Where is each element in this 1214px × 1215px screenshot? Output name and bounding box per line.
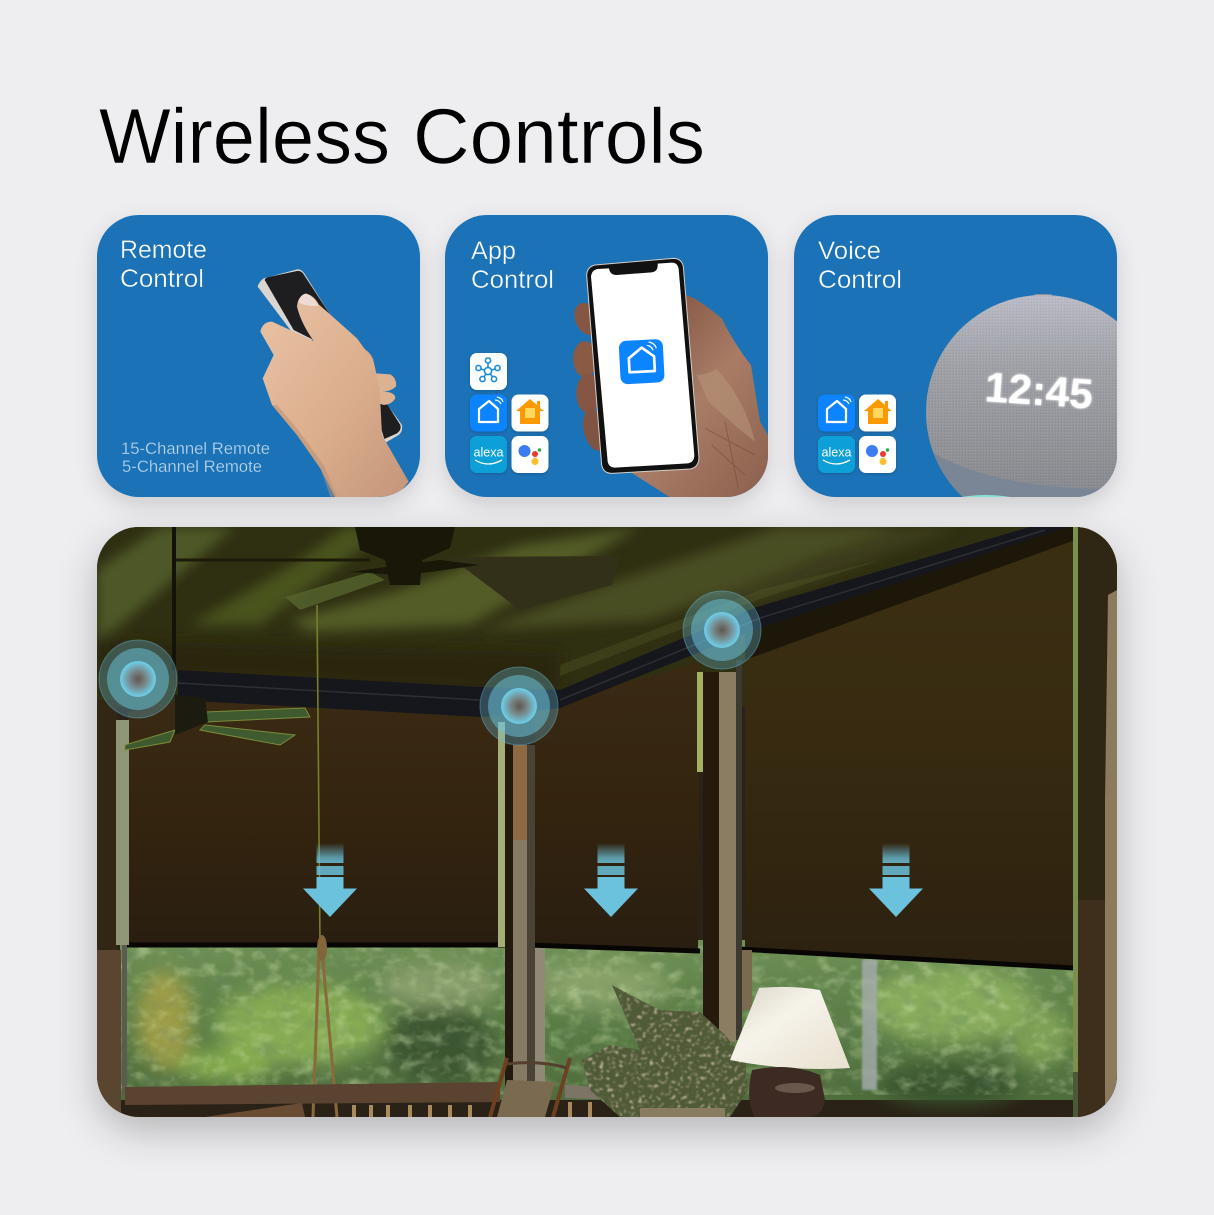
rocking chair — [490, 1058, 570, 1117]
icon: alexa: alexa — [474, 444, 504, 460]
panel: remote control — [97, 215, 420, 497]
panel: app control — [445, 215, 770, 498]
text: 5-channel remote: 5-Channel Remote — [122, 458, 262, 476]
ceiling fan — [350, 527, 480, 585]
panel: voice control — [787, 215, 1124, 512]
forest view — [120, 940, 1085, 1105]
heading: control: Control — [471, 266, 554, 294]
title — [99, 92, 705, 180]
digital clock text: 12:45 — [983, 363, 1094, 418]
icon: smart speaker — [926, 294, 1117, 497]
heading: control: Control — [120, 265, 204, 293]
smart hub signal 1 — [99, 640, 177, 718]
swing rope — [313, 605, 337, 1117]
heading: voice: Voice — [818, 237, 881, 265]
icon: google assistant — [859, 436, 896, 473]
left ceiling fan blades — [125, 695, 310, 750]
smart hub signal 2 — [480, 667, 558, 745]
icon: smart life app — [818, 394, 855, 432]
smart hub signal 3 — [683, 591, 761, 669]
ceiling — [97, 527, 1117, 707]
icon: hand holding phone — [570, 258, 770, 498]
potted plant — [580, 985, 750, 1117]
wood posts — [97, 527, 1117, 1117]
arrow down 1 — [303, 843, 357, 917]
shade 3 — [745, 527, 1075, 968]
icon: alexa — [818, 436, 855, 473]
table lamp — [730, 987, 850, 1117]
icon: smart hub app — [470, 353, 507, 390]
icon: hand holding remote — [258, 269, 409, 497]
roof beam — [178, 527, 1075, 717]
icon: google assistant — [512, 436, 548, 473]
arrow down 2 — [584, 843, 638, 917]
heading: remote: Remote — [120, 236, 207, 264]
icon: smart life app — [470, 394, 507, 432]
title: Wireless — [99, 92, 390, 180]
text: 15-channel remote: 15-Channel Remote — [121, 440, 270, 458]
title: Controls — [413, 92, 705, 180]
deck railing — [125, 1082, 620, 1117]
shade 1 — [128, 700, 500, 945]
shade 2 — [535, 662, 700, 950]
heading: app: App — [471, 237, 516, 265]
panel: porch photo — [97, 527, 1117, 1117]
icon: apple home — [859, 394, 896, 432]
icon: apple home — [512, 394, 548, 432]
icon: alexa — [470, 436, 507, 473]
arrow down 3 — [869, 843, 923, 917]
icon: alexa: alexa — [822, 444, 852, 460]
heading: control: Control — [818, 266, 902, 294]
shade bottom rails — [122, 945, 1075, 968]
